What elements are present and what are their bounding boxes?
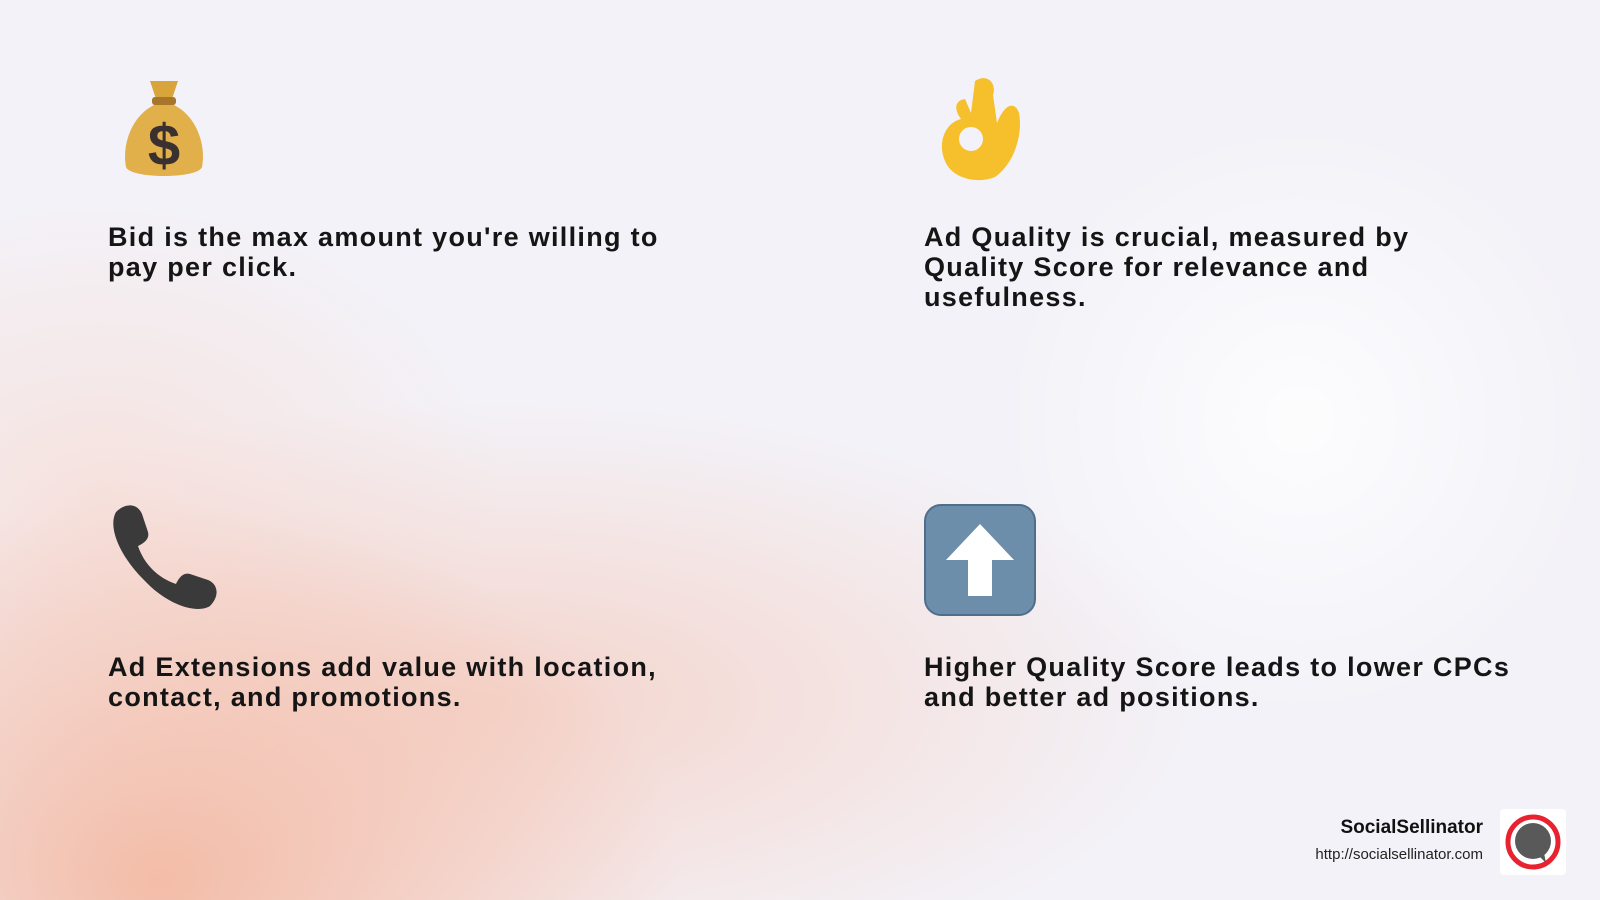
text: ad extensions: Ad Extensions add value with location, contact, and promotions. — [108, 652, 657, 712]
logo — [1500, 809, 1566, 875]
text: bid: Bid is the max amount you're willing to pay per click. — [108, 222, 659, 282]
text: higher quality score: Higher Quality Score leads to lower CPCs and better ad positions. — [924, 652, 1510, 712]
icon: phone — [113, 505, 217, 609]
icon: money bag: $ — [148, 113, 180, 178]
text: ad quality: Ad Quality is crucial, measured by Quality Score for relevance and usefulness. — [924, 222, 1409, 312]
brand block — [1315, 809, 1566, 875]
icon: money bag — [125, 81, 203, 178]
icon: up arrow — [924, 504, 1036, 616]
icon: ok hand — [942, 78, 1020, 180]
brand name: SocialSellinator — [1340, 817, 1483, 838]
brand url: http://socialsellinator.com — [1315, 846, 1483, 863]
